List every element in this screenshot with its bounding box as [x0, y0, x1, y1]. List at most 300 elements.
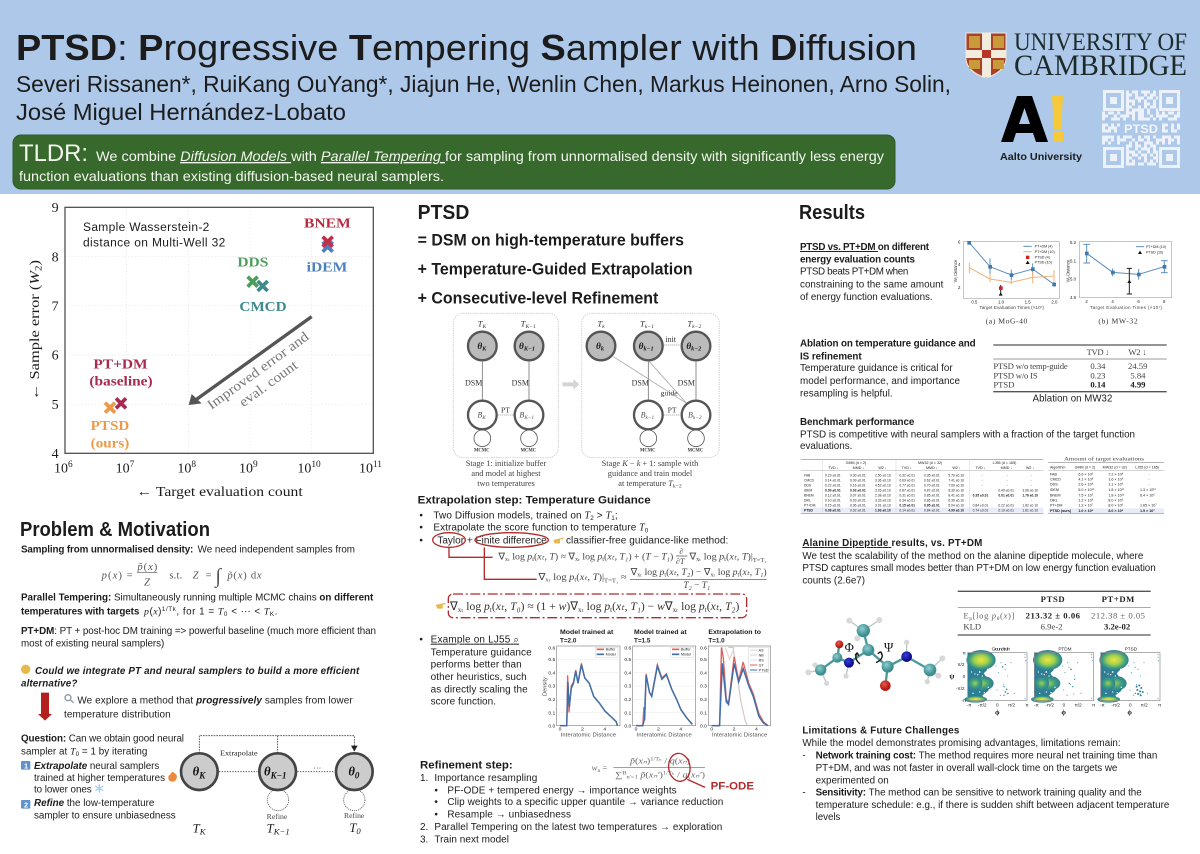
chart: MoG-40	[953, 240, 1059, 325]
diagram: stage K-k+1: T	[640, 319, 645, 329]
heatmaps: Ramachandran plots: 0	[963, 674, 966, 679]
table: amount of target evaluations: 1.0 × 10⁶	[1078, 509, 1094, 513]
diagram: stage K-k+1: k−1	[644, 346, 654, 353]
text: limitations: temperature schedule: e.g., if there is sudden shift between adjacent temperature	[816, 800, 1170, 811]
refinement steps: Train next model	[434, 834, 509, 845]
table: alanine results: θ	[997, 616, 1000, 622]
y axis label: ← Sample error (W	[28, 273, 43, 400]
heading: refinement: Refinement step:	[420, 759, 513, 771]
text: benchmark: evaluations.	[800, 441, 852, 452]
heatmaps: Ramachandran plots: π	[1025, 703, 1029, 708]
table: benchmark metrics: 0.77 ±0.01	[899, 483, 915, 487]
heatmaps: Ramachandran plots: ϕ	[1127, 708, 1132, 717]
question callout	[21, 666, 360, 690]
scatter chart: sample error vs evaluation count	[28, 201, 382, 500]
text: LJ55 example: Example on LJ55 ⌕	[431, 635, 519, 646]
refinement steps: Resample → unbiasedness	[447, 810, 571, 821]
scatter chart: sample error vs evaluation count: 7	[52, 299, 59, 314]
formula: importance weights: B	[622, 771, 627, 777]
text: sampling: We need independent samples from	[198, 545, 355, 556]
table: benchmark metrics: iDEM	[804, 488, 812, 492]
equation: temperature guidance: xₜ	[673, 605, 678, 614]
table: benchmark metrics: 0.06 ±0.01	[850, 503, 866, 507]
text: refine: sampler to ensure unbiasedness	[34, 810, 176, 821]
arrow: stage transition	[562, 379, 579, 390]
diagram: stage K-k+1: k−2	[693, 415, 702, 421]
heatmaps: Ramachandran plots: π/2	[1141, 703, 1148, 708]
bullets: extrapolate	[419, 523, 728, 546]
text: alanine dipeptide: We test the scalability of the method on the alanine dipeptide molecule, where	[802, 551, 1144, 562]
equation: temperature guidance: log	[584, 599, 604, 613]
chart: MW-32: 8	[1163, 299, 1166, 304]
equation: finite difference: T=T₁	[604, 579, 618, 585]
diagram: progressive temperature chain: Refine	[267, 813, 287, 821]
chart: extrapolation to T=1.0: AS	[759, 648, 764, 652]
chart: MW-32: PT+DM (10)	[1146, 245, 1166, 249]
icon: thinking face	[21, 665, 30, 674]
equation: temperature guidance: p	[483, 599, 490, 613]
formula: importance weights: /	[662, 756, 670, 765]
illustration: alanine dipeptide molecule: Ψ	[884, 640, 894, 654]
table: ablation on MW32: PTSD	[993, 379, 1015, 389]
text: extrapolate: to lower ones	[34, 785, 92, 796]
text: extrapolate: trained at higher temperatures	[34, 773, 165, 784]
table: alanine results: 3.2e-02	[1104, 621, 1130, 631]
table: benchmark metrics: PT+DM	[804, 503, 816, 507]
text: PTSD vs PT+DM: of energy function evaluations.	[800, 292, 933, 303]
equation: finite difference: xₜ	[710, 573, 716, 579]
equation: Taylor expansion: t	[602, 557, 604, 563]
table: benchmark metrics: 0.30 ±0.01	[850, 474, 866, 478]
chart: MW-32: 5.1	[1070, 258, 1077, 263]
equation: finite difference: ∇	[631, 568, 637, 578]
equation: Taylor expansion: xₜ, T) ≈ ∇	[537, 552, 574, 562]
method summary	[418, 231, 693, 307]
table: benchmark metrics: 0.74 ±0.01	[973, 508, 989, 512]
QR code	[1102, 92, 1180, 166]
text: parallel tempering: T	[264, 606, 271, 617]
refinement steps	[420, 773, 723, 845]
point labels: (ours)	[91, 436, 129, 451]
table: benchmark metrics: 0.62 ±0.01	[924, 479, 940, 483]
heatmaps: Ramachandran plots: 0	[1063, 703, 1066, 708]
equation: finite difference: xₜ, T₂) − ∇	[669, 568, 710, 578]
chart: model trained at T=1.5: 0.6	[624, 645, 631, 651]
table: ablation on MW32: 5.84	[1130, 370, 1146, 380]
chart: model trained at T=1.5: 0.4	[624, 670, 631, 676]
equation: Taylor expansion: (	[604, 551, 607, 562]
table: benchmark metrics: -	[982, 483, 983, 487]
text: limitations: experimented on	[816, 775, 889, 786]
diagram: progressive temperature chain: T	[267, 822, 274, 836]
table: benchmark metrics: 0.15 ±0.01	[899, 503, 915, 507]
heading: extrapolation: Extrapolation step: Temperature Guidance	[418, 494, 651, 506]
heading: Results	[799, 202, 865, 224]
heatmaps: Ramachandran plots: -π	[961, 698, 967, 703]
text: sampling: Sampling from unnormalised density:	[21, 545, 193, 556]
diagram: stage K-k+1: θ	[639, 342, 644, 352]
table: alanine results: 213.32 ± 0.06	[1026, 610, 1081, 620]
diagram: stage K-k+1: MCMC	[688, 448, 704, 453]
illustration: alanine dipeptide molecule: Φ	[845, 641, 854, 655]
icon: magnifier	[65, 695, 74, 703]
bullet: 1	[611, 515, 615, 522]
table: ablation on MW32	[993, 345, 1167, 405]
text: alanine dipeptide: counts (2.6e7)	[802, 575, 865, 586]
equation: finite difference: log	[642, 568, 659, 578]
table: benchmark metrics: DDS	[804, 483, 812, 487]
heatmaps: Ramachandran plots: PTSD	[1125, 646, 1138, 651]
chart: model trained at T=2.0: 0.3	[548, 684, 555, 690]
scatter chart: sample error vs evaluation count: 6	[68, 460, 73, 470]
equation: finite difference: ∇	[538, 573, 545, 583]
chart: extrapolation to T=1.0: NB	[759, 653, 764, 657]
chart: model trained at T=2.0: 2	[581, 727, 584, 733]
text: question: 0	[76, 751, 80, 758]
diagram: stage 1: MCMC	[521, 448, 537, 453]
chart: MoG-40: PTSD (4)	[1035, 255, 1050, 259]
diagram: stage 1: K−1	[524, 324, 536, 330]
table: amount of target evaluations: DiKL	[1050, 498, 1058, 502]
heatmaps: Ramachandran plots: π	[1158, 703, 1162, 708]
diagram: progressive temperature chain: T	[349, 821, 356, 835]
chart: MW-32: Target Evaluation Times (×10⁷)	[1090, 305, 1162, 310]
formula: normalised density: Z	[144, 577, 151, 588]
equation: finite difference: xₜ, T₁)	[743, 568, 767, 578]
chart: extrapolation to T=1.0: 0	[710, 727, 713, 733]
question callout: Could we integrate PT and neural samplers to build a more efficient	[35, 666, 360, 677]
scatter chart: sample error vs evaluation count: 8	[191, 460, 196, 470]
diagram: stage 1: B	[519, 411, 524, 420]
text: extrapolate: Extrapolate neural samplers	[34, 761, 159, 772]
chart: extrapolation to T=1.0: 0.3	[700, 684, 707, 690]
equation: Taylor expansion: xₜ	[505, 557, 510, 563]
table: benchmark metrics: 0.87 ±0.01	[899, 488, 915, 492]
formula: importance weights: n	[597, 768, 600, 774]
heatmaps: Ramachandran plots: π/2	[957, 662, 965, 667]
table: amount of target evaluations: 7.2 × 10⁸	[1108, 472, 1124, 476]
chart: MW-32: 4.9	[1070, 295, 1077, 300]
heatmaps: Ramachandran plots: ϕ	[995, 708, 1000, 717]
equation: temperature guidance: xₜ, T₂)	[711, 599, 739, 613]
equation: Taylor expansion: log	[580, 552, 597, 562]
icon: step 1	[21, 761, 30, 770]
equation: temperature guidance	[448, 594, 747, 618]
equation: temperature guidance: ∇	[450, 599, 458, 613]
table: benchmark metrics: 7.60 ±0.10	[948, 483, 964, 487]
table: amount of target evaluations: 1.65 × 10⁷	[1140, 503, 1157, 507]
table: benchmark metrics: TVD ↓	[828, 466, 839, 470]
point labels: DDS	[237, 255, 268, 270]
refinement steps: Parallel Tempering on the latest two temperatures → exploration	[434, 822, 722, 833]
equation: Taylor expansion: t	[724, 557, 726, 563]
text: LJ55 example: score function.	[431, 696, 496, 707]
TLDR box: We combine Diffusion Models with Parallel Tempering for sampling from unnormalised density with significantly less energy	[96, 149, 884, 164]
table: benchmark metrics: 0.10 ±0.01	[825, 498, 841, 502]
table: benchmark metrics: -	[982, 479, 983, 483]
bullet: >	[594, 510, 605, 521]
equation: finite difference: t	[664, 573, 666, 579]
text: alanine dipeptide: Alanine Dipeptide results, vs. PT+DM	[802, 538, 982, 549]
equation: finite difference: p	[568, 573, 575, 583]
table: benchmark metrics: FAB	[804, 474, 811, 478]
text: ablation: model performance, and importance	[800, 376, 961, 387]
table: amount of target evaluations: DDS	[1050, 483, 1058, 487]
chart: MoG-40: 2.0	[1051, 300, 1058, 305]
stage captions: Stage 1: initialize buffer	[466, 459, 547, 468]
text: ablation	[800, 339, 976, 400]
refinement steps: 1.	[420, 773, 428, 784]
chart: MW-32: (b) MW-32	[1098, 316, 1138, 325]
point labels: PTSD	[91, 418, 129, 433]
heatmaps: Ramachandran plots: -π/2	[1111, 703, 1120, 708]
table: amount of target evaluations: GMM (d = 2)	[1075, 465, 1095, 469]
table: amount of target evaluations: CMCD	[1050, 478, 1061, 482]
chart: model trained at T=2.0: 0.0	[548, 723, 555, 729]
table: alanine results: PTSD	[1041, 594, 1065, 604]
equation: temperature guidance: log	[463, 599, 484, 613]
table: alanine results: [log	[973, 611, 991, 621]
scatter chart: sample error vs evaluation count: 10	[311, 460, 321, 470]
text: parallel tempering: 0	[224, 611, 228, 618]
arrow: red down	[38, 693, 52, 721]
equation: finite difference	[537, 567, 767, 591]
text: LJ55 example: •	[419, 635, 423, 646]
diagram: stage 1: T	[478, 319, 482, 329]
chart: extrapolation to T=1.0: T=1.0	[708, 638, 725, 645]
chart note: Sample Wasserstein-2	[83, 220, 210, 234]
diagram: stage 1: θ	[519, 342, 524, 352]
refinement steps: •	[434, 785, 438, 796]
bullet: Two Diffusion models, trained on T	[433, 510, 590, 521]
equation: Taylor expansion: (	[534, 551, 537, 562]
diagram: stage K-k+1: DSM	[678, 379, 695, 388]
text: parallel tempering: < ⋯ <	[228, 606, 263, 617]
stage captions: and model at highest	[471, 469, 541, 478]
formula: importance weights: /	[675, 770, 682, 779]
table: benchmark metrics: 0.69 ±0.01	[899, 479, 915, 483]
equation: Taylor expansion: xₜ, T)|	[729, 552, 752, 562]
equation: finite difference: log	[551, 573, 569, 583]
table: benchmark metrics: 0.85 ±0.01	[924, 503, 940, 507]
text: refine: Refine the low-temperature	[34, 798, 155, 809]
table: benchmark metrics: 0.14 ±0.01	[899, 508, 915, 512]
diagram: stage K-k+1: DSM	[632, 379, 649, 388]
table: benchmark metrics: 0.23 ±0.01	[825, 474, 841, 478]
bullet: T	[606, 510, 613, 521]
bullets: extrapolate: classifier-free guidance-like method:	[566, 535, 728, 546]
table: benchmark metrics: 8.30 ±0.10	[948, 488, 964, 492]
refinement steps: 2.	[420, 822, 428, 833]
text: PTSD vs PT+DM: energy evaluation counts	[800, 255, 916, 266]
x axis label: ← Target evaluation count	[137, 485, 303, 500]
stage captions	[466, 459, 699, 489]
table: benchmark metrics: 0.70 ±0.01	[924, 483, 940, 487]
chart: model trained at T=1.5	[624, 629, 696, 739]
formula: importance weights: n'=1	[627, 775, 638, 781]
diagram: progressive temperature chain: K	[199, 827, 207, 837]
table: benchmark metrics: MMD ↓	[1001, 466, 1012, 470]
table: alanine results: E	[963, 611, 969, 621]
formula: importance weights: =	[600, 763, 607, 773]
diagram: progressive temperature chain: θ	[264, 765, 271, 779]
diagram: stage K-k+1: θ	[686, 342, 691, 352]
equation: Taylor expansion: ∇	[498, 552, 505, 562]
chart: MW-32: PTSD (10)	[1146, 251, 1163, 255]
scatter chart: sample error vs evaluation count: 10	[239, 461, 253, 476]
text: limitations: While the model demonstrates promising advantages, limitations remain:	[802, 738, 1121, 749]
table: benchmark metrics: 1.81 ±0.10	[1022, 508, 1038, 512]
chart: MW-32: 4	[1111, 299, 1114, 304]
table: amount of target evaluations: Amount of target evaluations	[1064, 456, 1144, 463]
table: benchmark metrics: LJ55 (d = 165)	[993, 461, 1016, 465]
bullet: ;	[615, 510, 618, 521]
table: benchmark metrics: 0.09 ±0.01	[825, 488, 841, 492]
formula: importance weights: ∑	[615, 770, 621, 779]
table: benchmark metrics: TVD ↓	[902, 466, 912, 470]
heatmaps: Ramachandran plots: -π	[1100, 703, 1106, 708]
header band	[0, 0, 1200, 194]
text: extrapolate	[34, 761, 165, 796]
diagram: stage K-k+1	[582, 313, 719, 458]
diagram: progressive temperature chain: K−1	[273, 827, 290, 837]
diagram: stage K-k+1: k	[602, 324, 605, 330]
stage captions: k−2	[673, 483, 682, 489]
question callout: alternative?	[21, 679, 77, 690]
chart: model trained at T=1.5: Model	[681, 653, 691, 657]
chart: MW-32: 2	[1085, 299, 1088, 304]
table: alanine results: p	[969, 616, 972, 622]
equation: Taylor expansion	[497, 547, 767, 566]
table: benchmark metrics: 0.85 ±0.01	[924, 493, 940, 497]
diagram: stage K-k+1: k−2	[691, 346, 702, 353]
panel: results top	[799, 202, 1172, 514]
diagram: stage K-k+1: k−1	[646, 415, 655, 421]
table: amount of target evaluations: 1.1 × 10⁹	[1108, 483, 1124, 487]
chart: extrapolation to T=1.0: RS	[759, 658, 764, 662]
table: ablation on MW32: 24.59	[1128, 361, 1147, 371]
table: benchmark metrics: CMCD	[804, 479, 815, 483]
scatter chart: sample error vs evaluation count: 8	[52, 250, 59, 265]
chart: extrapolation to T=1.0: Interatomic Distance	[712, 733, 767, 739]
equation: finite difference: p	[732, 568, 738, 578]
table: ablation on MW32: Ablation on MW32	[1033, 394, 1112, 405]
table: benchmark metrics: -	[982, 488, 983, 492]
heading: PTSD	[418, 202, 469, 224]
equation: finite difference: xₜ	[637, 573, 642, 579]
heatmaps: Ramachandran plots: 0	[996, 703, 999, 708]
table: benchmark metrics: 0.01 ±0.01	[998, 493, 1014, 497]
chart: extrapolation to T=1.0: 0.0	[700, 723, 707, 729]
chart: model trained at T=1.5: Buffer	[681, 648, 691, 652]
table: benchmark metrics: 0.02 ±0.01	[850, 508, 866, 512]
table: amount of target evaluations: LJ55 (d = 165)	[1135, 465, 1159, 469]
bullets: extrapolate: •	[419, 535, 423, 546]
chart: model trained at T=1.5: T=1.5	[634, 638, 651, 645]
table: benchmark metrics	[801, 460, 1043, 514]
chart: MoG-40: 2	[958, 285, 961, 290]
text: alanine dipeptide	[802, 538, 1156, 586]
text: limitations: PT+DM, and was not faster in overall wall-clock time on the targets we	[816, 763, 1118, 774]
point labels: BNEM	[304, 216, 351, 231]
text: limitations: Network training cost:	[816, 750, 916, 761]
refinement steps: •	[434, 797, 438, 808]
equation: temperature guidance: xₜ	[458, 605, 463, 614]
method summary: = DSM on high-temperature buffers	[418, 231, 684, 250]
equation: temperature guidance: t	[490, 605, 492, 614]
table: benchmark metrics: MW32 (d = 32)	[918, 461, 942, 465]
chart: model trained at T=1.5: 0.0	[624, 723, 631, 729]
table: benchmark metrics: 0.03 ±0.01	[850, 498, 866, 502]
formula: importance weights: w	[592, 763, 598, 773]
table: benchmark metrics: 0.15 ±0.01	[825, 503, 841, 507]
table: amount of target evaluations: 7.5 × 10⁹	[1078, 493, 1094, 497]
table: amount of target evaluations: 1.8 × 10¹⁰	[1108, 493, 1125, 497]
chart: model trained at T=2.0: 0.2	[548, 697, 555, 703]
equation: Taylor expansion: t	[532, 557, 534, 563]
chart: MoG-40: PT+DM (10)	[1035, 250, 1055, 254]
bullets: extrapolate: •	[419, 523, 423, 534]
formula: normalised density: ∫	[213, 565, 222, 588]
chart note	[83, 220, 226, 250]
table: benchmark metrics: 1.76 ±0.10	[1022, 493, 1038, 497]
stage captions: two temperatures	[477, 479, 535, 488]
table: amount of target evaluations: -	[1148, 478, 1150, 482]
text: PT+DM: PT+DM: PT + post-hoc DM training => powerful baseline (much more efficient than	[21, 626, 376, 637]
table: benchmark metrics: MMD ↓	[926, 466, 938, 470]
text: parallel tempering: .	[275, 606, 277, 617]
chart: MW-32: 6	[1137, 299, 1140, 304]
formula: normalised density: p(x) =	[101, 570, 133, 581]
point labels: PT+DM	[93, 356, 148, 371]
panel: PTSD method top	[418, 202, 719, 522]
table: benchmark metrics: BNEM	[804, 493, 814, 497]
equation: Taylor expansion: log	[701, 552, 719, 562]
diagram: progressive temperature chain: Refine	[344, 812, 364, 820]
chart: extrapolation to T=1.0: GT	[759, 663, 765, 667]
heatmaps: Ramachandran plots: π/2	[1075, 703, 1082, 708]
chart: model trained at T=2.0	[543, 629, 620, 739]
table: amount of target evaluations: 1.2 × 10⁷	[1078, 503, 1094, 507]
bullets: extrapolate: Extrapolate the score function to temperature T	[433, 523, 645, 534]
table: amount of target evaluations: 6.4 × 10⁹	[1140, 493, 1155, 497]
table: alanine results: (	[1000, 611, 1003, 621]
diagram: stage 1: PT	[501, 405, 510, 414]
text: limitations: -	[802, 750, 806, 761]
equation: Taylor expansion: p	[596, 552, 603, 562]
text: parallel tempering: T	[218, 606, 225, 617]
arrow: improved direction: eval. count	[237, 358, 301, 411]
chart: model trained at T=1.5: Interatomic Distance	[637, 733, 692, 739]
heatmaps: Ramachandran plots: π	[1092, 703, 1096, 708]
diagram: stage K-k+1: k	[601, 346, 605, 353]
diagram: progressive temperature chain: θ	[348, 765, 355, 779]
chart: model trained at T=2.0: 0.1	[548, 710, 555, 716]
text: question	[21, 734, 184, 758]
icon: pointing hand	[553, 537, 564, 543]
heatmaps: Ramachandran plots: PTDM	[1058, 646, 1072, 651]
table: alanine results: 6.9e-2	[1041, 621, 1063, 631]
heatmaps: Ramachandran plots	[949, 646, 1162, 717]
chart: MoG-40: 1.5	[1025, 300, 1031, 305]
annotation: PF-ODE	[667, 752, 754, 792]
authors	[16, 71, 951, 125]
equation: Taylor expansion: log	[510, 552, 527, 562]
chart: extrapolation to T=1.0: 0.5	[700, 657, 707, 663]
diagram: stage 1: K	[481, 415, 486, 421]
text: method	[64, 695, 353, 720]
method summary: + Temperature-Guided Extrapolation	[418, 259, 693, 278]
